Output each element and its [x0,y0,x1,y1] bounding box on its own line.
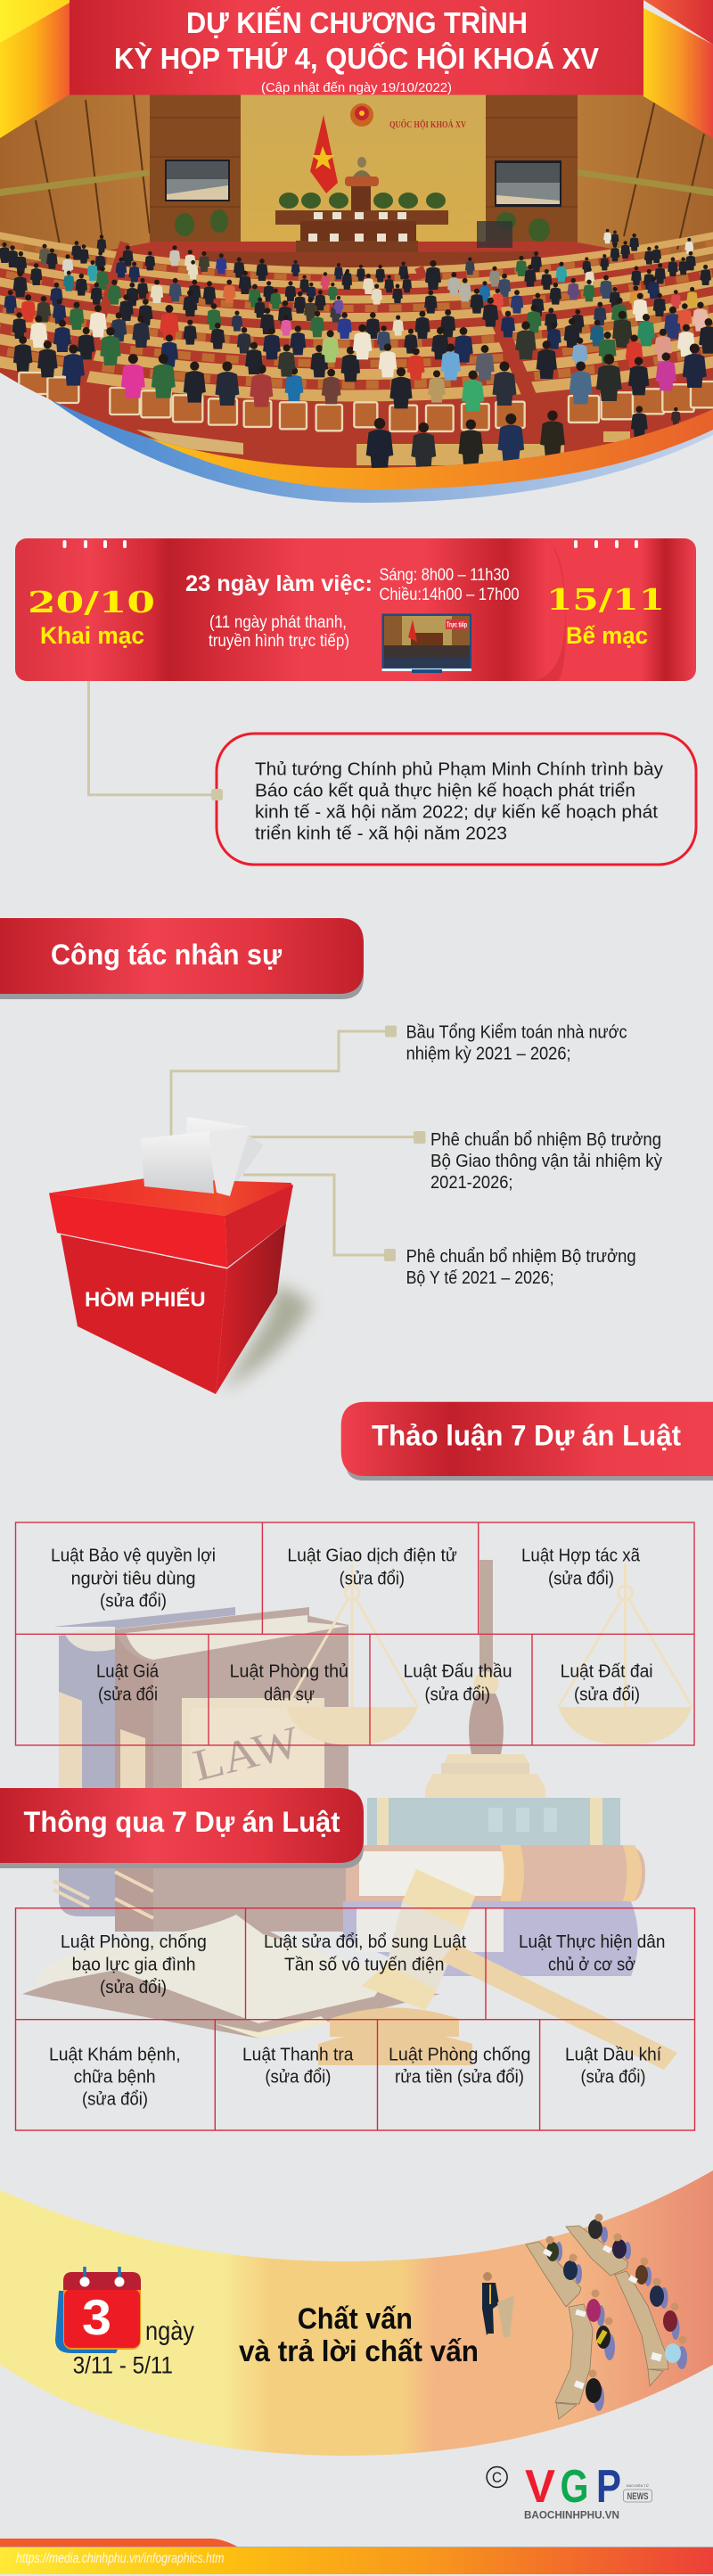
delegates left half [0,235,360,407]
cell: radio frequencies: Tần số vô tuyến điện [284,1956,444,1975]
cell: land [561,1662,653,1704]
panel: session calendar band [15,538,696,681]
cell: cooperatives: (sửa đổi) [548,1569,614,1588]
small seat backs along rows [0,235,713,385]
opening label: Khai mạc [40,622,144,649]
cell: medical treatment: chữa bệnh [74,2068,156,2088]
bullets [384,1025,426,1261]
cell: prices: Luật Giá [96,1662,160,1682]
icon: calendar 3 days [55,2267,141,2353]
icon: calendar 3 days: 3 [82,2289,111,2345]
middle sheet curved edge [533,538,566,681]
heading: personnel work: Công tác nhân sự [51,939,283,971]
cell: consumer protection: người tiêu dùng [71,1569,196,1588]
heading: personnel work [0,918,364,999]
closing label: Bế mạc [566,622,648,649]
heading: discuss 7 draft laws: Thảo luận 7 Dự án Luật [372,1420,681,1452]
callout: Prime Minister's report [211,734,696,865]
cell: domestic violence [61,1932,207,1998]
cell: grassroots democracy: chủ ở cơ sở [548,1956,635,1975]
broadcast note: (11 ngày phát thanh, [209,613,347,632]
illustration: delegates and speaker [482,2214,687,2419]
cell: e-transactions [287,1546,457,1588]
peach book [346,1845,645,1901]
cell: domestic violence: Luật Phòng, chống [61,1932,207,1952]
icon: copyright [487,2467,507,2487]
cell: inspection: (sửa đổi) [265,2068,331,2088]
callout: Prime Minister's report: Thủ tướng Chính phủ Phạm Minh Chính trình bày [255,759,663,779]
brown book [115,1607,348,1932]
logo: VGP news: BÁO ĐIỆN TỬ [627,2483,650,2488]
table: 7 laws under discussion [16,1522,694,1745]
gavel head [387,1901,463,1990]
logo: VGP news: BAOCHINHPHU.VN [524,2509,619,2522]
heading: interpellation: và trả lời chất vấn [239,2334,479,2367]
cell: medical treatment: Luật Khám bệnh, [49,2046,181,2065]
logo: VGP news: NEWS [627,2491,649,2502]
update date: (Cập nhật đến ngày 19/10/2022) [261,80,452,95]
connector: opening day to report callout [89,681,223,800]
table: 7 laws to be passed [16,1908,695,2130]
cell: inspection [242,2046,354,2088]
heading: discuss 7 draft laws [341,1402,713,1481]
cell: land: Luật Đất đai [561,1662,653,1682]
text: minister of transport [430,1130,662,1193]
cell: prices [96,1662,160,1704]
cell: civil defence: Luật Phòng thủ [230,1662,348,1682]
afternoon hours: Chiều:14h00 – 17h00 [380,586,519,604]
logo: VGP news: P [596,2461,621,2513]
cell: bidding [403,1662,512,1704]
law label [182,1698,324,1789]
cell: consumer protection: Luật Bảo vệ quyền lợi [51,1546,216,1566]
cell: bidding: (sửa đổi) [424,1685,490,1704]
cell: e-transactions: Luật Giao dịch điện tử [287,1546,457,1566]
header ribbon: right fold [643,0,713,138]
calendar rings right [574,540,638,548]
cell: prices: (sửa đổi [98,1685,158,1704]
screens [165,160,230,201]
cell: civil defence [230,1662,348,1704]
logo: VGP news [524,2461,652,2522]
right scale [558,1564,692,1707]
cell: anti money laundering [389,2046,530,2088]
speaker [482,2272,514,2337]
text: date range: 3/11 - 5/11 [73,2352,173,2379]
logo: VGP news: G [560,2461,588,2513]
teal book [367,1798,620,1845]
icon: ballot box: HÒM PHIẾU [85,1286,206,1310]
text: minister of health [406,1247,636,1288]
seated delegates [543,2214,686,2403]
header arc: blue and orange stripes under the photo [36,389,713,503]
background illustration: law books, scales and gavel [22,1560,692,2070]
connector lines to personnel items [171,1031,414,1255]
broadcast note [209,613,349,651]
logo: VGP news: V [525,2461,555,2513]
background illustration: law books, scales and gavel: LAW [188,1716,305,1791]
lower desks [136,430,630,465]
text: auditor general: Bầu Tổng Kiểm toán nhà nước [406,1023,627,1043]
closing date: 15/11 [546,582,665,617]
cell: land: (sửa đổi) [574,1685,640,1704]
central golden wall [241,94,486,242]
chairs [555,2227,687,2411]
cell: grassroots democracy: Luật Thực hiện dân [519,1932,665,1952]
title line 1: DỰ KIẾN CHƯƠNG TRÌNH [186,6,528,39]
text: minister of transport: 2021-2026; [430,1173,513,1193]
cell: domestic violence: bạo lực gia đình [72,1956,196,1975]
broadcast note: truyền hình trực tiếp) [209,632,349,651]
emblem [350,103,373,127]
delegates right half [353,229,713,468]
calendar rings left [62,540,127,548]
cell: petroleum [565,2046,661,2088]
cell: medical treatment: (sửa đổi) [82,2090,148,2110]
cell: civil defence: dân sự [264,1685,315,1704]
text: minister of health: Phê chuẩn bổ nhiệm Bộ trưởng [406,1247,636,1267]
cell: consumer protection [51,1546,216,1611]
gavel handle [441,1943,677,2070]
header ribbon: left fold [0,0,70,138]
hero photo: National Assembly hall [0,89,713,481]
right wall [578,89,713,267]
footer [0,2539,713,2574]
cream spine plates [59,1692,145,1788]
cell: radio frequencies [264,1932,466,1975]
callout: Prime Minister's report: Báo cáo kết quả thực hiện kế hoạch phát triển [255,781,635,800]
footer: https://media.chinhphu.vn/infographics.htm [16,2551,225,2566]
cell: domestic violence: (sửa đổi) [100,1978,167,1998]
cell: inspection: Luật Thanh tra [242,2046,354,2065]
text: auditor general: nhiệm kỳ 2021 – 2026; [406,1045,571,1064]
heading: pass 7 draft laws: Thông qua 7 Dự án Luật [23,1806,340,1838]
callout: Prime Minister's report: kinh tế - xã hội năm 2022; dự kiến kế hoạch phát [255,802,658,822]
desk rows [0,228,713,396]
callout: Prime Minister's report: triển kinh tế - xã hội năm 2023 [255,824,507,843]
cell: petroleum: Luật Dầu khí [565,2046,661,2065]
text: auditor general [406,1023,627,1064]
morning hours: Sáng: 8h00 – 11h30 [380,566,510,585]
text: minister of health: Bộ Y tế 2021 – 2026; [406,1268,554,1288]
cell: consumer protection: (sửa đổi) [100,1591,167,1611]
carpet aisles [80,241,537,394]
text: ngày: ngày [145,2317,194,2346]
icon: copyright: C [492,2469,502,2486]
sound block [318,2007,472,2065]
cell: medical treatment [49,2046,181,2110]
title line 2: KỲ HỌP THỨ 4, QUỐC HỘI KHOÁ XV [114,41,599,75]
cell: anti money laundering: Luật Phòng chống [389,2046,530,2065]
plants [175,193,550,242]
open book [22,1915,440,2039]
dark slatted panels [150,94,241,242]
hall name: QUỐC HỘI KHOÁ XV [389,119,467,130]
header banner with title [70,0,643,95]
left scale [286,1564,418,1707]
heading: interpellation [239,2302,479,2367]
desks [526,2226,668,2419]
cell: cooperatives [521,1546,641,1588]
gavel stand [479,1560,493,1680]
heading: interpellation: Chất vấn [298,2302,413,2335]
icon: ballot box [49,1117,312,1394]
icon: television [381,613,471,673]
blue book [53,1607,235,1916]
bust and podium [345,157,379,213]
cell: petroleum: (sửa đổi) [581,2068,645,2088]
opening date: 20/10 [28,585,155,619]
cell: bidding: Luật Đấu thầu [403,1662,512,1682]
working days: 23 ngày làm việc: [185,571,373,596]
cell: grassroots democracy [519,1932,665,1975]
flag [310,115,338,193]
purple book [343,1901,638,1976]
book lower stripes [53,1872,153,1918]
stage desks [205,210,535,271]
heading: pass 7 draft laws [0,1788,364,1868]
cameras right of stage [477,221,512,248]
front seats [19,373,342,431]
cell: cooperatives: Luật Hợp tác xã [521,1546,641,1566]
left wall [0,89,150,267]
text: minister of transport: Phê chuẩn bổ nhiệm Bộ trưởng [430,1130,661,1150]
icon: television: Trực tiếp [447,620,467,629]
panel: interpellation band [0,2170,713,2456]
cell: anti money laundering: rửa tiền (sửa đổi) [395,2068,524,2088]
cell: radio frequencies: Luật sửa đổi, bổ sung Luật [264,1932,466,1952]
text: minister of transport: Bộ Giao thông vận tải nhiệm kỳ [430,1152,662,1171]
cell: e-transactions: (sửa đổi) [340,1569,405,1588]
